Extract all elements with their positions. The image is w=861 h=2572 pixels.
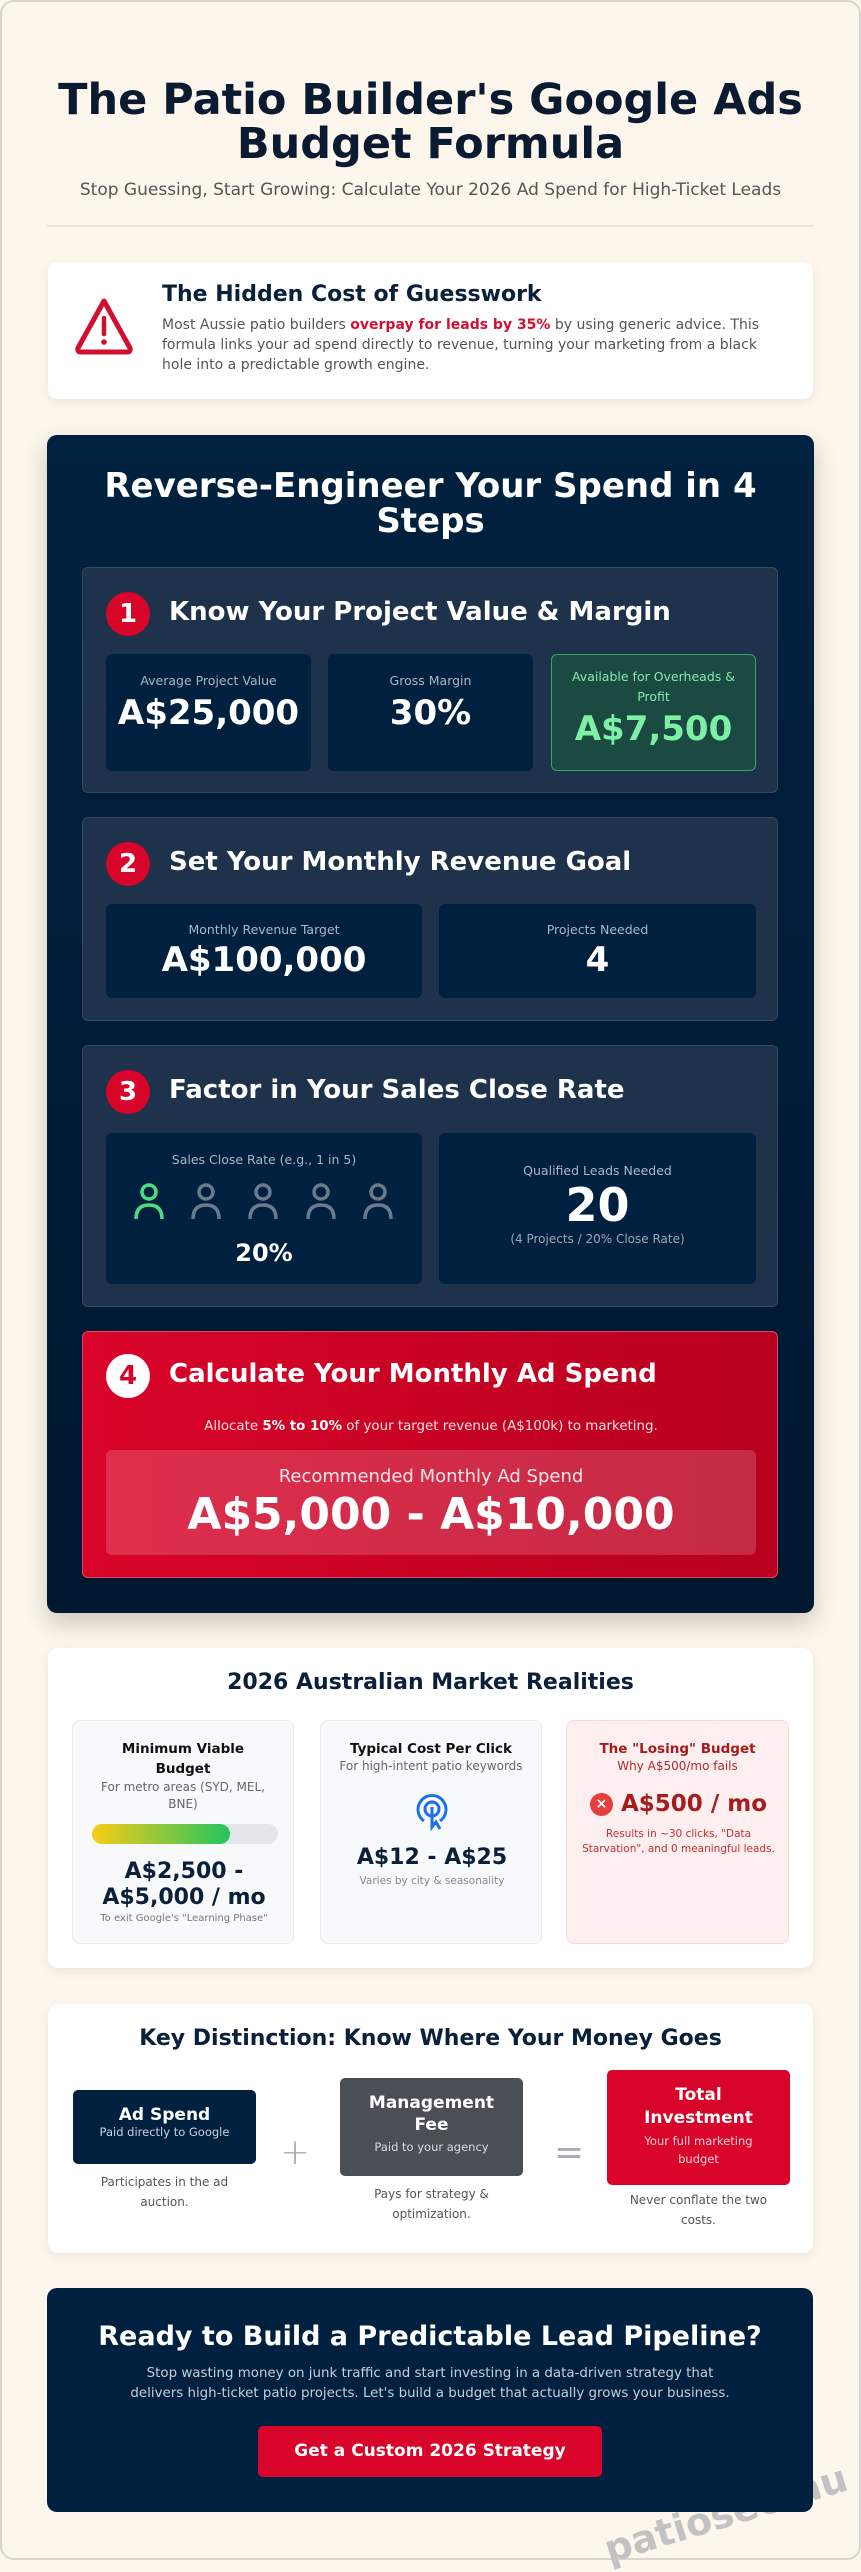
card: minimum budget [72,1720,294,1944]
heading: Steps [376,501,485,541]
box: close rate [106,1133,422,1284]
card: cpc: For high-intent patio keywords [339,1759,523,1773]
step 3 [82,1045,778,1307]
panel: steps [47,435,814,1613]
card: minimum budget: For metro areas (SYD, MEL, [101,1780,265,1794]
card: cpc [320,1720,542,1944]
button [258,2426,602,2477]
title [58,75,803,169]
box: management fee: Management [369,2093,494,2113]
box: close rate: Sales Close Rate (e.g., 1 in 5) [172,1152,356,1167]
box: project value [106,654,311,771]
heading: Reverse-Engineer Your Spend in 4 [104,466,757,506]
card: minimum budget: BNE) [168,1797,198,1811]
heading: Ready to Build a Predictable Lead Pipeline? [98,2321,762,2352]
box: project value: A$25,000 [118,693,299,733]
step 2: Set Your Monthly Revenue Goal [169,847,631,877]
watermark: patioseo.au [599,2456,853,2572]
card: losing budget: Starvation", and 0 meaningful leads. [582,1843,775,1855]
box: management fee [340,2078,523,2176]
icon: people [134,1183,393,1219]
box: total: budget [678,2152,719,2166]
title: The Patio Builder's Google Ads [58,75,803,125]
callout: recommended: Recommended Monthly Ad Spend [279,1466,583,1487]
step 1 [82,567,778,793]
step 2: 2 [119,849,137,879]
card: cpc: Typical Cost Per Click [350,1741,512,1757]
panel: key distinction: optimization. [392,2207,471,2221]
card: cpc: Varies by city & seasonality [360,1875,504,1887]
box: available: Profit [637,689,670,704]
title: Budget Formula [237,119,624,169]
step 1: Know Your Project Value & Margin [169,597,671,627]
panel: key distinction: Never conflate the two [630,2193,767,2207]
box: gross margin [328,654,533,771]
box: leads needed: (4 Projects / 20% Close Rate) [510,1232,685,1246]
card: losing budget: Why A$500/mo fails [617,1759,738,1773]
card: minimum budget: A$5,000 / mo [102,1885,266,1910]
step 3: Factor in Your Sales Close Rate [169,1075,625,1105]
box: total: Your full marketing [644,2134,753,2148]
step 3: 3 [119,1077,137,1107]
button: Get a Custom 2026 Strategy [294,2441,566,2461]
box: revenue target [106,904,422,998]
text block [130,2366,730,2401]
panel: key distinction: Participates in the ad [101,2175,228,2189]
box: projects needed: Projects Needed [547,922,648,937]
box: gross margin: Gross Margin [390,673,471,688]
step 4: Calculate Your Monthly Ad Spend [169,1359,657,1389]
box: revenue target: Monthly Revenue Target [188,922,340,937]
box: management fee: Paid to your agency [374,2140,489,2154]
box: leads needed: Qualified Leads Needed [523,1163,672,1178]
card: losing budget: Results in ~30 clicks, "Data [606,1828,751,1840]
text block: delivers high-ticket patio projects. Let's build a budget that actually grows your business. [130,2386,730,2401]
text block: Most Aussie patio builders overpay for leads by 35% by using generic advice. This formula links your ad spend directly to revenue, turning your marketing from a black hole into a predictable growth engine. [162,317,759,373]
card: minimum budget: Budget [156,1761,210,1777]
card: minimum budget: A$2,500 - [125,1859,243,1884]
box: ad spend: Paid directly to Google [100,2125,229,2139]
step 4: 4 [119,1361,137,1391]
bar [92,1824,278,1844]
panel: key distinction: costs. [681,2213,716,2227]
text block: Stop wasting money on junk traffic and start investing in a data-driven strategy that [147,2366,713,2381]
box: ad spend [73,2090,256,2164]
heading [104,466,757,541]
panel: CTA [47,2288,813,2512]
box: total: Investment [644,2108,753,2128]
step 2 [82,817,778,1021]
step 1: 1 [119,599,137,629]
box: close rate: 20% [235,1239,293,1267]
heading: Key Distinction: Know Where Your Money Goes [139,2026,722,2051]
panel: key distinction: auction. [140,2195,189,2209]
panel: hidden cost [48,262,813,399]
card: minimum budget: To exit Google's "Learning Phase" [100,1913,268,1924]
card: losing budget: × [596,1796,607,1812]
heading: The Hidden Cost of Guesswork [162,282,542,307]
box: leads needed [439,1133,756,1284]
box: revenue target: A$100,000 [162,940,366,980]
icon: warning [75,298,133,354]
box: available: A$7,500 [575,709,732,749]
icon: click [416,1794,448,1832]
box: projects needed: 4 [586,940,609,980]
card: losing budget: A$500 / mo [621,1791,767,1817]
box: leads needed: 20 [565,1178,630,1232]
callout: recommended [106,1450,756,1555]
box: ad spend: Ad Spend [119,2105,210,2125]
box: available: Available for Overheads & [572,669,735,684]
box: projects needed [439,904,756,998]
icon: plus: + [280,2132,310,2173]
text block: Allocate 5% to 10% of your target revenue (A$100k) to marketing. [204,1419,658,1434]
box: gross margin: 30% [390,693,471,733]
icon: equals: = [554,2132,584,2173]
step 4 [82,1331,778,1578]
panel: key distinction: Pays for strategy & [374,2187,489,2201]
card: losing budget: The "Losing" Budget [599,1741,756,1757]
panel: market realities [48,1648,813,1968]
box: management fee: Fee [414,2115,448,2135]
panel: key distinction [48,2004,813,2253]
box: total [607,2070,790,2185]
box: project value: Average Project Value [140,673,277,688]
box: total: Total [675,2085,722,2105]
heading: 2026 Australian Market Realities [227,1670,634,1695]
box: available [551,654,756,771]
card: minimum budget: Minimum Viable [122,1741,244,1757]
card: cpc: A$12 - A$25 [357,1845,507,1870]
subtitle: Stop Guessing, Start Growing: Calculate Your 2026 Ad Spend for High-Ticket Leads [80,180,781,200]
callout: recommended: A$5,000 - A$10,000 [187,1489,675,1540]
card: losing budget [566,1720,789,1944]
